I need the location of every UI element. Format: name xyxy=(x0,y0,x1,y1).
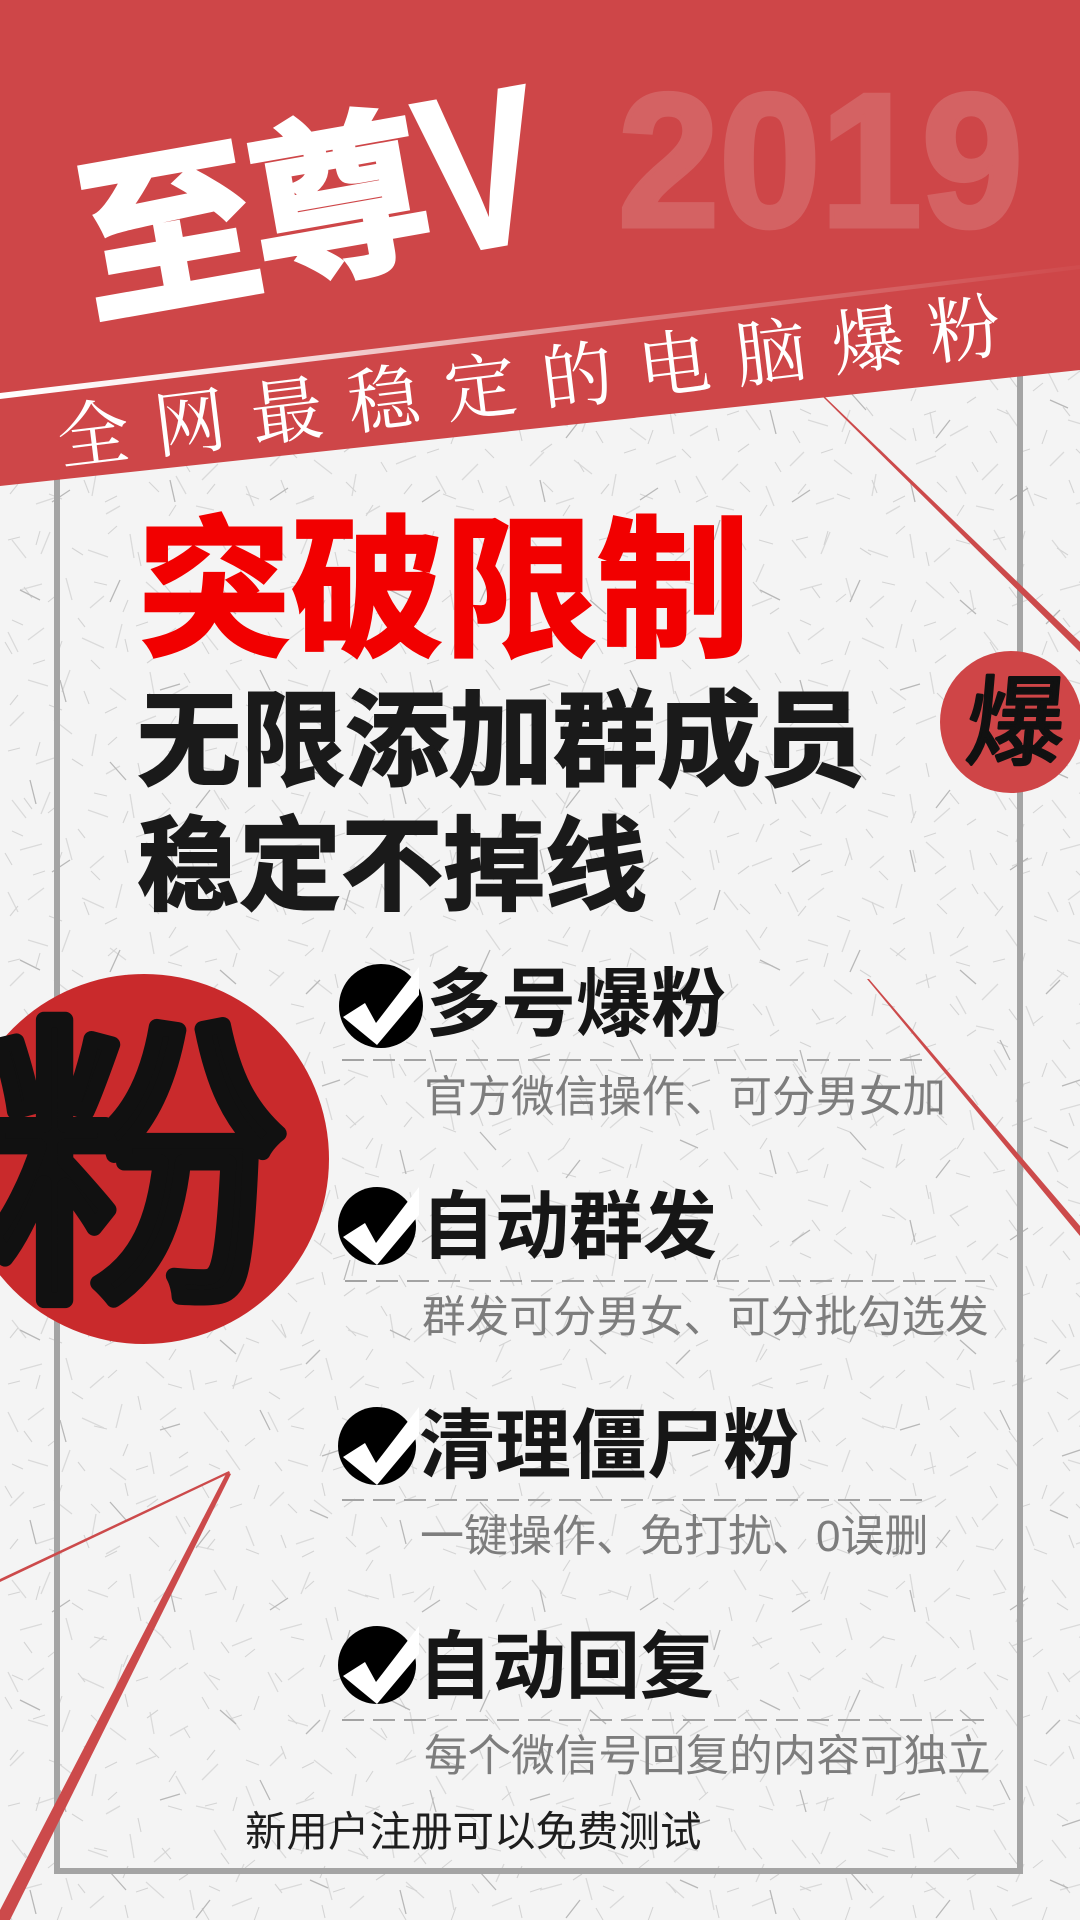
check icon xyxy=(338,1626,419,1704)
badge: 爆: 爆 xyxy=(962,668,1070,778)
heading: 突破限制: 突破限制 xyxy=(138,506,750,677)
gray frame xyxy=(57,360,1020,1871)
feature title: 自动群发 xyxy=(421,1185,717,1268)
heading: 稳定不掉线: 稳定不掉线 xyxy=(137,810,647,924)
feature: 自动回复 xyxy=(338,1625,991,1781)
red triangle lines bottom left xyxy=(0,1471,231,1920)
header shine line xyxy=(0,265,1080,399)
subtitle: 全网最稳定的电脑爆粉 xyxy=(53,283,1030,480)
badge: 爆 xyxy=(940,651,1080,793)
title: 至尊V: V xyxy=(400,36,561,304)
check icon xyxy=(338,1187,419,1265)
red diagonal line top right xyxy=(823,397,1080,652)
year 2019: 2019 xyxy=(618,55,1023,267)
header banner xyxy=(0,0,1080,486)
feature description: 官方微信操作、可分男女加 xyxy=(424,1074,946,1122)
feature title: 清理僵尸粉 xyxy=(419,1404,799,1489)
feature description: 每个微信号回复的内容可独立 xyxy=(424,1733,991,1781)
feature: 清理僵尸粉 xyxy=(338,1404,930,1561)
feature title: 多号爆粉 xyxy=(426,962,726,1046)
title: 至尊V: 至 xyxy=(64,121,274,348)
title: 至尊V xyxy=(64,36,561,348)
feature title: 自动回复 xyxy=(418,1625,714,1708)
title: 至尊V: 尊 xyxy=(234,89,444,316)
check icon xyxy=(339,964,423,1048)
red diagonal line middle right xyxy=(867,979,1080,1236)
heading: 无限添加群成员: 无限添加群成员 xyxy=(137,684,865,800)
feature description: 群发可分男女、可分批勾选发 xyxy=(422,1294,989,1342)
footer note: 新用户注册可以免费测试 xyxy=(245,1808,702,1855)
check icon xyxy=(338,1407,419,1485)
feature description: 一键操作、免打扰、0误删 xyxy=(420,1512,928,1561)
feature: 自动群发 xyxy=(338,1185,989,1342)
feature: 多号爆粉 xyxy=(339,962,946,1122)
